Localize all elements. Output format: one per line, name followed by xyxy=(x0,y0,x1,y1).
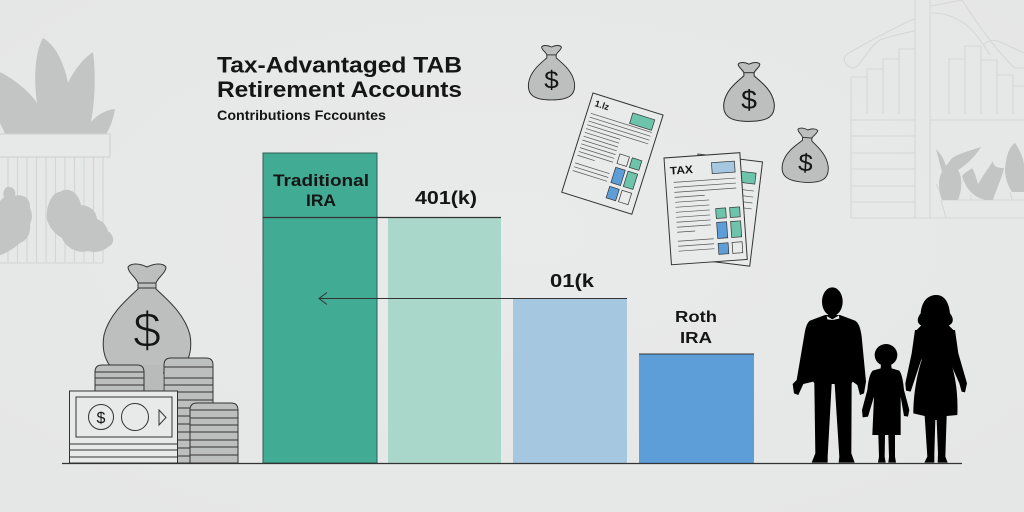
bar: 401(k): 401(k) xyxy=(415,187,477,208)
icon: small money bag 2 xyxy=(724,63,774,121)
icon: small money bag 1 xyxy=(528,45,575,100)
icon: small money bag 2: $ xyxy=(741,85,757,115)
child xyxy=(862,344,909,463)
icon: small money bag 1: $ xyxy=(544,67,559,94)
icon: large money bag: $ xyxy=(133,302,161,358)
bar: 401(k) xyxy=(388,187,501,463)
title xyxy=(217,52,462,102)
icon: small money bag 3 xyxy=(781,127,831,184)
bar: Traditional IRA: IRA xyxy=(306,191,336,210)
arrow xyxy=(319,292,627,304)
tax document 3, back sheet xyxy=(685,154,763,266)
background house and bars, top right xyxy=(844,0,1024,218)
title: Tax-Advantaged TAB xyxy=(217,52,462,78)
bar: Roth IRA xyxy=(639,309,754,463)
woman xyxy=(905,295,967,463)
icon: large money bag xyxy=(103,264,191,373)
bar: Traditional IRA: Traditional xyxy=(273,171,369,190)
bar: 01(k: 01(k xyxy=(550,270,595,291)
tax document 1: 1.lz xyxy=(594,98,611,112)
tax document 2, front sheet xyxy=(664,153,747,265)
background plant planter, top left xyxy=(0,38,115,263)
ground baseline xyxy=(62,462,962,464)
family silhouette xyxy=(793,287,967,463)
banknote bundle: $ xyxy=(97,410,106,427)
subtitle: Contributions Fccountes xyxy=(217,108,386,123)
banknote bundle xyxy=(69,391,178,463)
man xyxy=(793,287,866,463)
icon: small money bag 3: $ xyxy=(797,149,814,177)
tax document 2, front sheet: TAX xyxy=(670,164,694,178)
bar: Traditional IRA xyxy=(263,153,377,463)
bar: Roth IRA: IRA xyxy=(680,330,712,347)
tax document 1 xyxy=(562,93,663,214)
title: Retirement Accounts xyxy=(217,77,462,102)
bar chart xyxy=(263,153,754,463)
money stack illustration xyxy=(69,264,238,463)
bar: Roth IRA: Roth xyxy=(675,309,717,326)
bar: 01(k xyxy=(513,270,627,463)
coin stacks xyxy=(95,358,238,463)
